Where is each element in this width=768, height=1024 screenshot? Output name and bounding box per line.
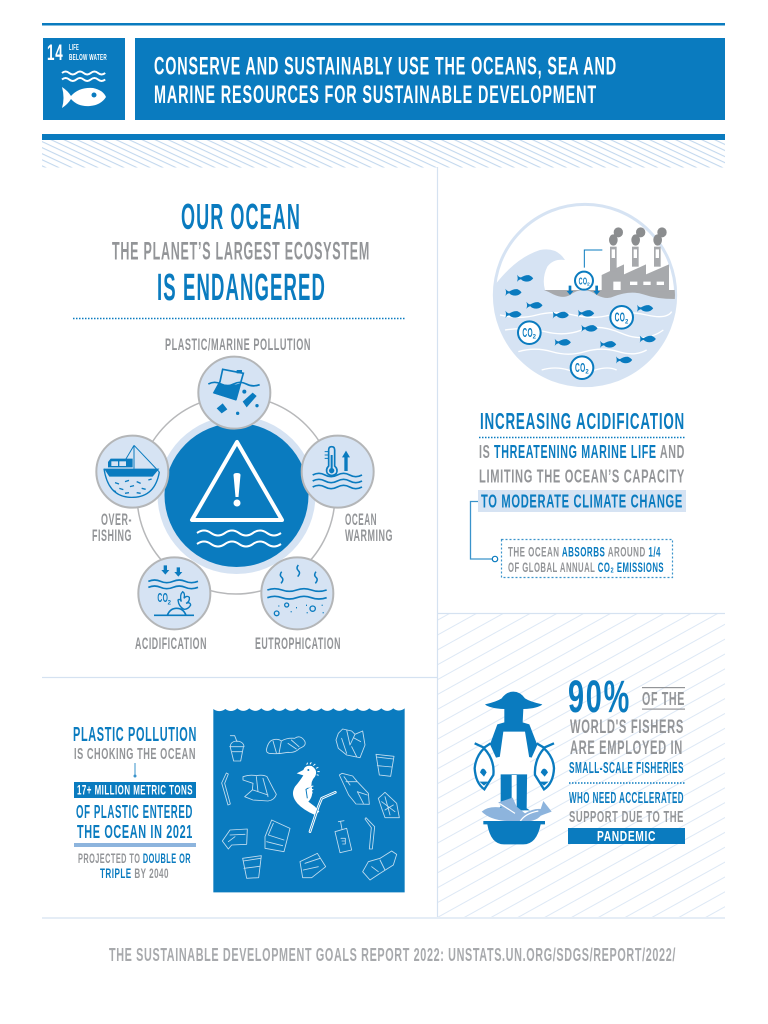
plastic pollution text block: PLASTIC POLLUTION <box>73 724 197 746</box>
bag left <box>243 775 276 801</box>
label: ocean warming: OCEAN <box>345 511 377 529</box>
factory <box>602 227 669 292</box>
crushed bottle <box>266 737 305 754</box>
cup <box>376 754 394 776</box>
callout: absorbs CO2: THE OCEAN ABSORBS AROUND 1/4 <box>508 544 661 560</box>
illustration: ocean acidification <box>490 204 683 395</box>
SDG 14 badge: BELOW WATER <box>69 53 107 62</box>
SDG 14 badge <box>43 38 125 120</box>
icon: eutrophication <box>267 565 327 616</box>
pump bottle <box>335 821 352 853</box>
plastic pollution text block: 17+ MILLION METRIC TONS <box>77 782 193 798</box>
callout: absorbs CO2: OF GLOBAL ANNUAL CO₂ EMISSIONS <box>508 560 664 575</box>
plastic pollution text block <box>73 724 197 881</box>
ocean plastic illustration <box>213 708 405 892</box>
plastic bag <box>336 729 365 758</box>
right hanging fish <box>535 743 554 789</box>
main heading <box>112 196 370 309</box>
plastic pollution text block: IS CHOKING THE OCEAN <box>74 746 196 763</box>
label: overfishing: FISHING <box>92 527 132 545</box>
hatched panel background <box>437 613 725 917</box>
straw right <box>365 818 375 849</box>
main heading: IS ENDANGERED <box>157 267 326 309</box>
cup with straw <box>230 736 244 761</box>
bowl <box>483 821 545 844</box>
straw on seahorse <box>310 792 335 832</box>
plastic pollution text block: PROJECTED TO DOUBLE OR <box>78 851 191 866</box>
icon: acidification: CO <box>157 591 168 605</box>
hatched strip <box>42 140 725 168</box>
icon: fishing boat <box>104 445 159 497</box>
label: eutrophication: EUTROPHICATION <box>255 634 341 653</box>
icon: acidification <box>148 565 198 615</box>
CO2 bubbles: 2 <box>533 335 537 341</box>
label: overfishing: OVER- <box>101 511 132 529</box>
title banner <box>135 38 725 120</box>
label: plastic pollution: PLASTIC/MARINE POLLUTION <box>165 335 311 354</box>
plastic pollution text block: OF PLASTIC ENTERED <box>76 802 193 822</box>
main heading: THE PLANET’S LARGEST ECOSYSTEM <box>112 238 370 266</box>
acidification text block: IS THREATENING MARINE LIFE AND <box>479 441 685 462</box>
connecting ring <box>137 396 335 594</box>
CO2 bubbles <box>518 272 633 379</box>
crushed item far right <box>378 792 399 818</box>
plastic pollution text block: TRIPLE BY 2040 <box>100 866 169 881</box>
icon: acidification: 2 <box>168 600 172 606</box>
CO2 bubbles: 2 <box>587 282 590 288</box>
header bar <box>42 134 725 140</box>
bottle right <box>339 773 369 804</box>
fishers text block: PANDEMIC <box>597 828 656 845</box>
fishers text block: WORLD'S FISHERS <box>570 717 684 738</box>
plastic pollution text block: THE OCEAN IN 2021 <box>77 822 193 842</box>
acidification text block <box>478 408 686 512</box>
central warning circle <box>158 416 316 574</box>
fisher illustration <box>475 692 554 844</box>
label: acidification: ACIDIFICATION <box>135 634 207 653</box>
seahorse <box>293 762 320 815</box>
fishers text block: ARE EMPLOYED IN <box>570 738 683 759</box>
CO2 bubbles: 2 <box>625 319 629 325</box>
callout: absorbs CO2 <box>502 540 672 578</box>
SDG 14 badge: LIFE <box>69 43 79 52</box>
CO2 bubbles: CO <box>615 310 625 325</box>
packets <box>222 829 247 849</box>
fishers text block: SUPPORT DUE TO THE <box>569 809 684 826</box>
label: ocean warming <box>345 511 393 545</box>
CO2 bubbles: 2 <box>585 370 589 376</box>
icon: thermometer <box>313 447 362 489</box>
dotted divider <box>73 318 406 320</box>
left hanging fish <box>475 743 494 789</box>
CO2 bubbles: CO <box>522 325 533 340</box>
icon: pollution <box>208 369 260 415</box>
fishers text block <box>568 671 685 845</box>
cup bottom <box>243 856 261 878</box>
SDG 14 badge: 14 <box>47 40 64 65</box>
fishers text block: 90% <box>568 671 631 722</box>
panel dividers <box>42 167 725 918</box>
bottle bottom right <box>363 851 397 880</box>
straw left <box>222 773 230 805</box>
icon circle backgrounds and icons in source coordinates <box>96 357 374 629</box>
main heading: OUR OCEAN <box>181 196 301 237</box>
CO2 bubbles: CO <box>579 276 587 287</box>
label: overfishing <box>92 511 132 545</box>
top rule <box>42 23 725 26</box>
fish <box>505 275 656 364</box>
fish pile <box>482 798 552 822</box>
label: ocean warming: WARMING <box>345 527 393 545</box>
fishers text block: OF THE <box>642 689 685 709</box>
connector line <box>470 502 498 562</box>
threats diagram <box>92 357 393 629</box>
CO2 bubbles: CO <box>575 360 586 375</box>
